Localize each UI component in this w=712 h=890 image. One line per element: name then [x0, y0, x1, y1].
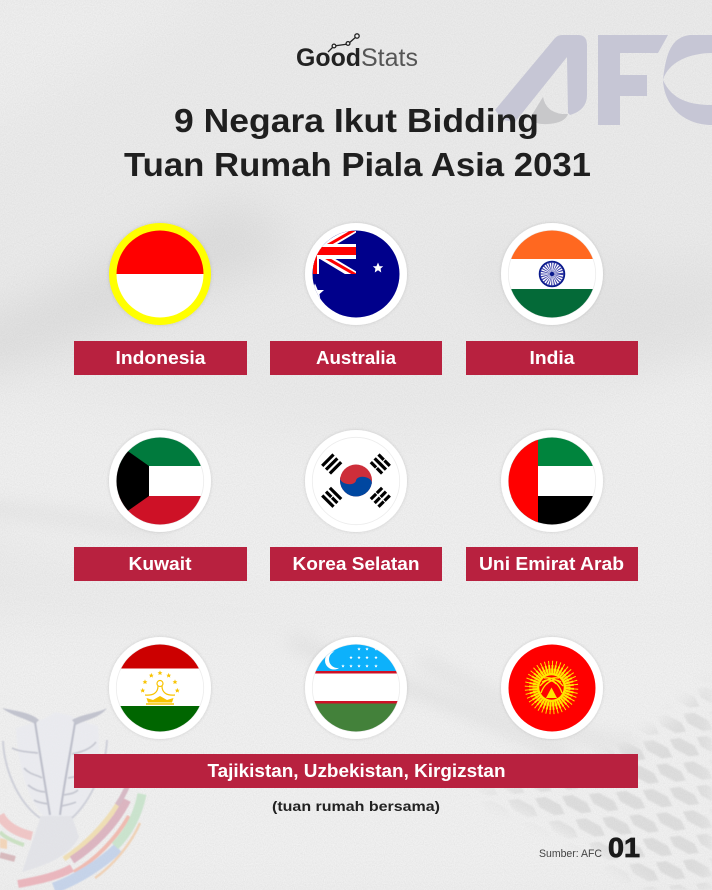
title [124, 102, 591, 183]
flag: India [501, 223, 603, 325]
trophy and ribbon illustration [0, 708, 142, 888]
card: India [466, 223, 638, 375]
label: Kuwait: Kuwait [128, 554, 192, 574]
flag: Indonesia [109, 223, 211, 325]
title: 9 Negara Ikut Bidding [174, 102, 539, 139]
logo wordmark: Good: Good [296, 44, 361, 72]
AFC watermark logo [495, 35, 712, 125]
card: Kuwait [74, 430, 247, 581]
flag: Uni Emirat Arab [501, 430, 603, 532]
note: tuan rumah bersama: (tuan rumah bersama) [272, 798, 440, 814]
flag: Australia [305, 223, 407, 325]
card: Australia [270, 223, 442, 375]
label: Australia [270, 341, 442, 375]
logo wordmark: Stats: Stats [361, 44, 418, 72]
trophy [2, 708, 107, 872]
flag: Korea Selatan [305, 430, 407, 532]
label: Tajikistan, Uzbekistan, Kirgizstan [74, 754, 638, 788]
label: India: India [530, 348, 576, 368]
card: Tajikistan, Uzbekistan, Kirgizstan [74, 637, 638, 788]
label: Indonesia [74, 341, 247, 375]
card: Indonesia [74, 223, 247, 375]
label: Korea Selatan: Korea Selatan [292, 554, 420, 574]
label: Uni Emirat Arab: Uni Emirat Arab [479, 554, 624, 574]
ribbons [0, 785, 142, 888]
flag: Kuwait [109, 430, 211, 532]
label: Tajikistan, Uzbekistan, Kirgizstan: Tajikistan, Uzbekistan, Kirgizstan [208, 761, 506, 781]
card: Korea Selatan [270, 430, 442, 581]
source note: Sumber: AFC [539, 848, 602, 860]
GoodStats logo [296, 34, 418, 72]
card: Uni Emirat Arab [466, 430, 638, 581]
logo line icon [328, 34, 359, 52]
label: Indonesia: Indonesia [116, 348, 207, 368]
flag: Kirgizstan [501, 637, 603, 739]
flag: Tajikistan [109, 637, 211, 739]
title: Tuan Rumah Piala Asia 2031 [124, 146, 591, 183]
label: Uni Emirat Arab [466, 547, 638, 581]
flag: Uzbekistan [305, 637, 407, 739]
label: Australia: Australia [316, 348, 397, 368]
label: Korea Selatan [270, 547, 442, 581]
label: India [466, 341, 638, 375]
label: Kuwait [74, 547, 247, 581]
page number: 01 [608, 832, 640, 863]
